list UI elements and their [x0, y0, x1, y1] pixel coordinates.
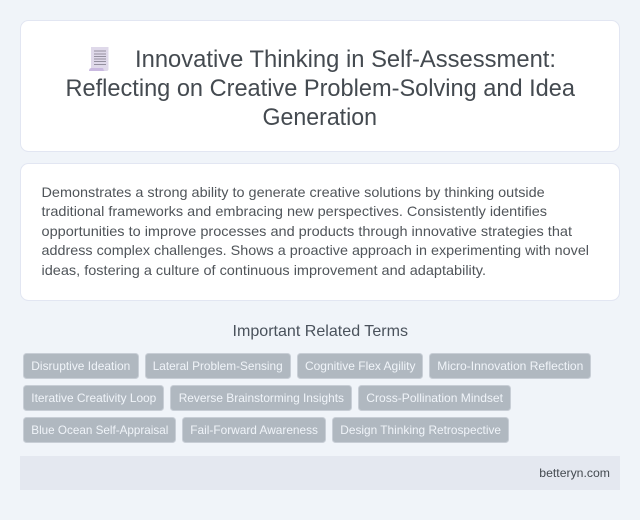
- description text: opportunities to improve processes and products through innovative strategies that: [42, 223, 572, 239]
- tag: Fail-Forward Awareness: [182, 418, 326, 442]
- description text: [42, 184, 589, 278]
- tag: Disruptive Ideation: [24, 354, 138, 378]
- icon: document scroll: [89, 47, 108, 71]
- tag: Reverse Brainstorming Insights: Reverse Brainstorming Insights: [179, 391, 344, 405]
- tags: [24, 354, 590, 442]
- footer source label: betteryn.com: [539, 466, 610, 480]
- description text: ideas, fostering a culture of continuous improvement and adaptability.: [42, 262, 486, 278]
- tag: Cognitive Flex Agility: Cognitive Flex Agility: [305, 359, 416, 373]
- description text: address complex challenges. Shows a proactive approach in experimenting with novel: [42, 242, 589, 258]
- panel: header card: [20, 20, 620, 152]
- tag: Fail-Forward Awareness: Fail-Forward Awareness: [190, 423, 318, 437]
- footer: [20, 456, 620, 490]
- title: Reflecting on Creative Problem-Solving and Idea: [66, 75, 576, 102]
- tag: Cognitive Flex Agility: [298, 354, 422, 378]
- title: Innovative Thinking in Self-Assessment:: [135, 46, 556, 73]
- tag: Micro-Innovation Reflection: [430, 354, 590, 378]
- tag: Blue Ocean Self-Appraisal: Blue Ocean Self-Appraisal: [31, 423, 168, 437]
- tag: Design Thinking Retrospective: [332, 418, 508, 442]
- description text: Demonstrates a strong ability to generate creative solutions by thinking outside: [42, 184, 545, 200]
- tag: Cross-Pollination Mindset: Cross-Pollination Mindset: [366, 391, 504, 405]
- title: [66, 46, 576, 131]
- heading: important related terms: Important Related Terms: [232, 323, 408, 340]
- tag: Lateral Problem-Sensing: [146, 354, 290, 378]
- panel: description card: [20, 164, 620, 300]
- tag: Disruptive Ideation: Disruptive Ideation: [31, 359, 130, 373]
- title: Generation: [262, 104, 377, 131]
- tag: Reverse Brainstorming Insights: [170, 386, 352, 410]
- tag: Blue Ocean Self-Appraisal: [24, 418, 176, 442]
- tag: Micro-Innovation Reflection: Micro-Innovation Reflection: [437, 359, 583, 373]
- tag: Cross-Pollination Mindset: [358, 386, 510, 410]
- tag: Iterative Creativity Loop: Iterative Creativity Loop: [31, 391, 157, 405]
- tag: Iterative Creativity Loop: [24, 386, 164, 410]
- tag: Lateral Problem-Sensing: Lateral Problem-Sensing: [153, 359, 283, 373]
- description text: traditional frameworks and embracing new perspectives. Consistently identifies: [42, 203, 547, 219]
- tag: Design Thinking Retrospective: Design Thinking Retrospective: [340, 423, 501, 437]
